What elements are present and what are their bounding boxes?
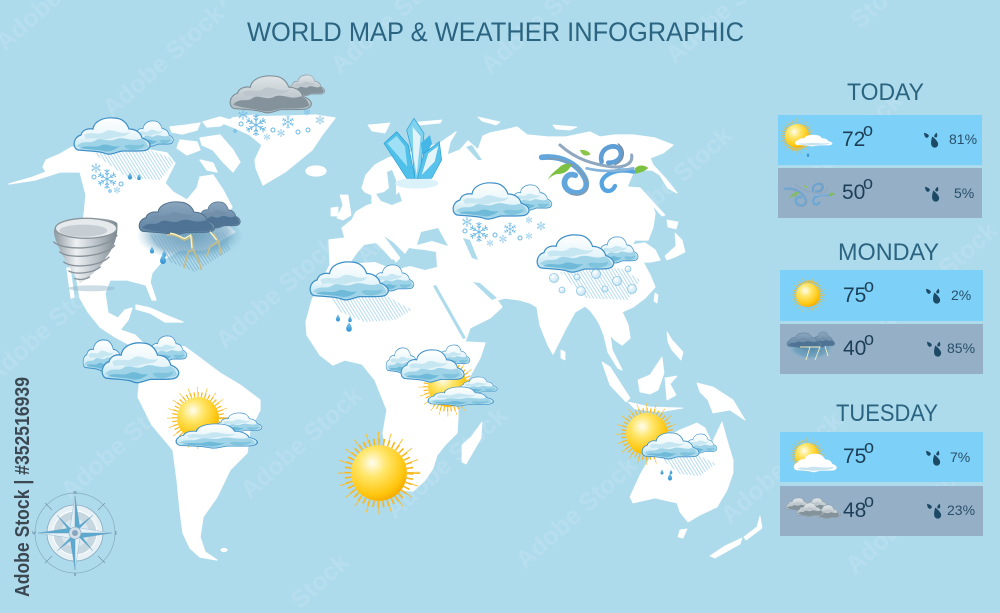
Caspian <box>463 238 478 260</box>
world map <box>9 115 677 560</box>
Sumatra and Java <box>602 362 683 412</box>
icon: compass rose: N <box>73 490 77 495</box>
icon: snow cloud over Canada <box>74 118 176 194</box>
row: monday day forecast <box>780 270 983 321</box>
row: monday day forecast: 75 <box>843 284 866 307</box>
icon: large sun over southern Africa <box>344 438 414 508</box>
panel: tuesday <box>780 400 983 536</box>
heading: tuesday: TUESDAY <box>836 400 938 427</box>
row: tuesday day forecast: o <box>864 437 874 457</box>
northern islands <box>368 117 577 133</box>
row: today night forecast: 5% <box>954 185 974 201</box>
row: today night forecast: o <box>863 173 873 193</box>
continent: Eurasia and Africa <box>306 127 677 491</box>
row: monday day forecast: o <box>864 276 874 296</box>
Iceland <box>306 166 326 176</box>
icon: compass rose: W <box>32 530 37 536</box>
row: tuesday day forecast: 75 <box>843 445 866 468</box>
Madagascar <box>462 422 482 464</box>
Italy <box>379 234 400 262</box>
row: monday night forecast <box>780 324 983 374</box>
Arctic islands <box>170 115 255 172</box>
row: today night forecast <box>778 168 982 218</box>
seas <box>350 145 497 339</box>
row: today day forecast: 72 <box>842 128 865 151</box>
Persian Gulf <box>473 282 497 300</box>
icon: grey snow cloud over Greenland <box>230 75 325 140</box>
row: monday night forecast: 40 <box>843 337 866 360</box>
watermarks: Adobe Stock <box>350 146 483 269</box>
row: today day forecast: 81% <box>949 131 977 147</box>
Borneo <box>638 357 664 394</box>
icon: wind with leaves <box>542 144 648 195</box>
continent: South America <box>138 345 260 560</box>
Falkland islands <box>221 548 227 552</box>
Greenland <box>220 115 335 185</box>
Sakhalin and Japan <box>641 190 685 260</box>
icon: ice crystal <box>384 118 442 189</box>
icon: hail cloud over China <box>537 235 640 300</box>
watermarks: Adobe Stock <box>870 216 1000 339</box>
watermarks: Adobe Stock <box>55 381 188 504</box>
row: today day forecast: o <box>863 120 873 140</box>
row: monday day forecast: 2% <box>951 287 971 303</box>
continent: North America <box>9 147 235 345</box>
row: tuesday night forecast: 23% <box>947 502 975 518</box>
icon: compass rose: S <box>74 572 77 577</box>
watermarks: Adobe Stock <box>210 231 343 354</box>
panel: today <box>778 79 982 218</box>
Philippines <box>667 332 683 360</box>
Black Sea <box>417 228 448 246</box>
icon: snow cloud over Russia <box>453 183 552 246</box>
icon: sun and clouds over central Africa <box>386 345 497 412</box>
row: today night forecast: 50 <box>842 181 865 204</box>
icon: rain cloud over North Africa <box>310 262 414 332</box>
row: monday night forecast: o <box>864 329 874 349</box>
Baltic <box>376 170 402 205</box>
watermarks: Adobe Stock <box>715 406 848 529</box>
Taiwan and Sri Lanka <box>561 293 658 360</box>
icon: compass rose: E <box>115 530 118 536</box>
New Guinea <box>697 383 745 420</box>
islands <box>331 117 762 558</box>
Baja California <box>67 268 74 298</box>
row: today day forecast <box>778 115 982 165</box>
row: tuesday day forecast <box>780 432 983 482</box>
row: tuesday night forecast <box>780 486 983 536</box>
icon: sun, cloud and rain over Australia <box>621 408 717 480</box>
heading: today: TODAY <box>847 79 924 106</box>
watermarks: Adobe Stock <box>510 451 643 574</box>
Tasmania <box>678 529 687 538</box>
watermarks: Adobe Stock <box>235 381 368 504</box>
Sulawesi <box>665 376 677 400</box>
watermarks: Adobe Stock <box>97 0 230 122</box>
watermarks: Adobe Stock <box>380 401 513 524</box>
watermarks: Stock <box>285 548 355 613</box>
watermarks: Adobe Stock <box>840 456 973 579</box>
panel: monday <box>780 239 983 374</box>
row: tuesday night forecast: 48 <box>843 499 866 522</box>
New Zealand <box>710 516 762 558</box>
row: tuesday night forecast: o <box>864 491 874 511</box>
heading: monday: MONDAY <box>838 239 939 266</box>
Mediterranean <box>350 236 437 270</box>
watermarks: Adobe Stock <box>605 121 738 244</box>
Arctic inlet <box>466 145 482 160</box>
Australia <box>630 422 733 522</box>
icon: cloud cluster over Colombia <box>83 336 187 383</box>
title: WORLD MAP & WEATHER INFOGRAPHIC <box>247 17 744 47</box>
icon: sun and clouds over Brazil <box>172 392 262 448</box>
stock id vertical text: Adobe Stock | #352516939 <box>12 377 34 597</box>
Red Sea <box>433 285 466 339</box>
Britain and Ireland <box>331 195 351 220</box>
watermarks: Adobe Stock <box>775 86 908 209</box>
icon: thunderstorm cloud <box>136 202 244 272</box>
row: monday night forecast: 85% <box>947 340 975 356</box>
icon: compass rose <box>32 490 118 577</box>
row: tuesday day forecast: 7% <box>950 449 970 465</box>
Caribbean islands <box>136 305 183 322</box>
icon: tornado <box>53 218 117 291</box>
